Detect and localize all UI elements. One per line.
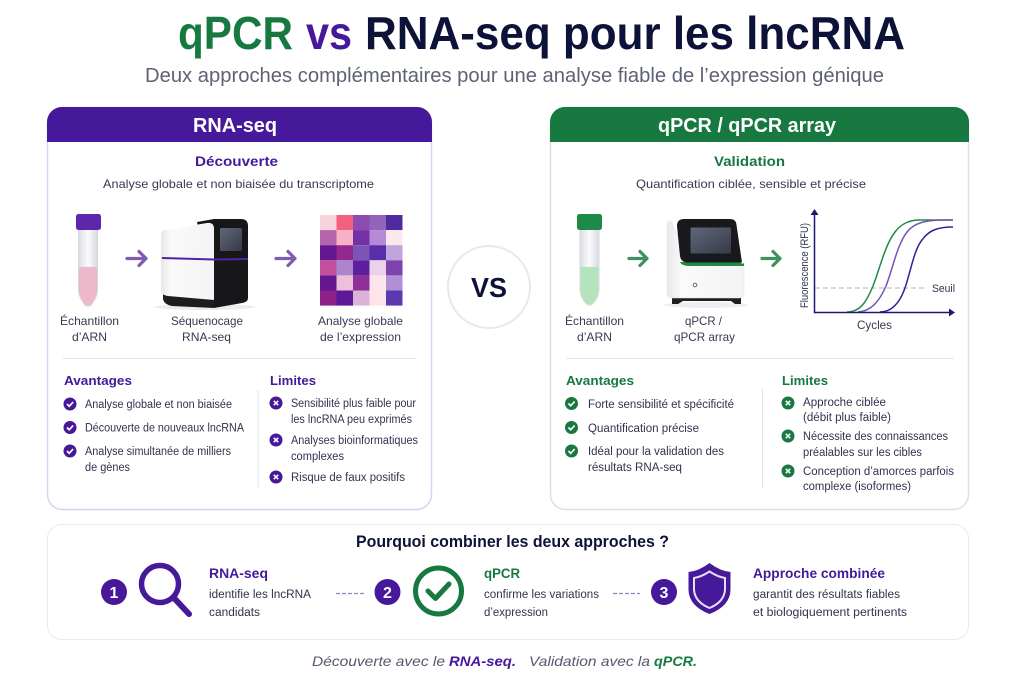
description: Quantification ciblée, sensible et précise xyxy=(636,177,866,191)
heading: Avantages: Avantages xyxy=(566,373,634,388)
label: instrument: qPCR / xyxy=(685,314,723,328)
arrow xyxy=(276,252,295,266)
label: sample xyxy=(60,313,119,344)
step 2 text: confirme les variations xyxy=(484,589,599,601)
heading: Limites: Limites xyxy=(782,373,828,388)
step 1 text: RNA-seq xyxy=(209,566,268,581)
list: avantages xyxy=(64,398,244,474)
panel header: RNA-seq xyxy=(47,107,432,142)
heading: Limites: Limites xyxy=(270,373,316,388)
step 3 text: garantit des résultats fiables xyxy=(753,589,900,601)
icon: qPCR machine xyxy=(664,219,748,308)
label: sample: Échantillon xyxy=(60,313,119,328)
list: limites: Approche ciblée xyxy=(803,397,886,409)
list: avantages xyxy=(565,397,734,474)
step 2 badge xyxy=(374,579,400,605)
label: threshold: Seuil xyxy=(932,283,955,295)
step 3 badge: 3 xyxy=(660,585,669,602)
panel header: qPCR: qPCR / qPCR array xyxy=(658,115,837,137)
list: avantages: Analyse simultanée de milliers xyxy=(85,446,231,458)
label: sample xyxy=(565,313,624,344)
footer tagline: Validation avec la xyxy=(529,653,650,669)
footer tagline xyxy=(312,653,697,669)
VS badge: VS xyxy=(471,272,507,303)
list: limites: complexe (isoformes) xyxy=(803,481,911,493)
list: limites: Analyses bioinformatiques xyxy=(291,435,418,447)
step 3 text xyxy=(753,566,907,619)
list: limites: Sensibilité plus faible pour xyxy=(291,398,416,410)
list: limites: Risque de faux positifs xyxy=(291,472,405,484)
label: sequencing: Séquenocage xyxy=(171,314,243,328)
chart: amplification curves xyxy=(799,209,955,332)
heading: Découverte: Découverte xyxy=(195,153,278,169)
list: avantages: Forte sensibilité et spécificité xyxy=(588,399,734,411)
step 2 text xyxy=(484,566,599,619)
step 2 text: qPCR xyxy=(484,566,520,581)
list: avantages: Analyse globale et non biaisée xyxy=(85,399,232,411)
icon: magnifier xyxy=(142,566,189,614)
arrow xyxy=(762,252,780,266)
label: instrument: qPCR array xyxy=(674,330,735,344)
list: limites: Nécessite des connaissances xyxy=(803,431,948,443)
icon: shield xyxy=(688,563,730,614)
icon: sample tube green xyxy=(577,214,602,305)
label: instrument xyxy=(674,314,735,344)
step 1 text: candidats xyxy=(209,607,260,619)
list: limites: (débit plus faible) xyxy=(803,412,891,424)
label: sample: d’ARN xyxy=(72,330,107,344)
list: limites: préalables sur les cibles xyxy=(803,447,922,459)
step 2 text: d’expression xyxy=(484,607,548,619)
step 2 badge: 2 xyxy=(383,585,392,602)
heatmap xyxy=(320,215,402,306)
title: vs xyxy=(306,7,352,59)
step 3 badge xyxy=(651,579,677,605)
panel header: RNA-seq: RNA-seq xyxy=(193,115,277,137)
step 1 badge xyxy=(101,579,127,605)
label: analysis xyxy=(318,314,403,344)
list: limites: Conception d’amorces parfois xyxy=(803,466,954,478)
label: analysis: Analyse globale xyxy=(318,314,403,328)
step 1 badge: 1 xyxy=(110,585,119,602)
list: limites: les lncRNA peu exprimés xyxy=(291,414,412,426)
step 1 text: identifie les lncRNA xyxy=(209,589,311,601)
list: limites: complexes xyxy=(291,451,344,463)
label: sequencing xyxy=(171,314,243,344)
axis label: x: Cycles xyxy=(857,318,892,332)
list: limites xyxy=(270,396,418,484)
title: qPCR xyxy=(178,7,293,59)
list: avantages: Quantification précise xyxy=(588,423,699,435)
icon: sequencer xyxy=(155,219,255,310)
label: analysis: de l’expression xyxy=(320,330,401,344)
panel: why combine xyxy=(48,524,968,640)
list: avantages: Idéal pour la validation des xyxy=(588,446,724,458)
list: avantages: de gènes xyxy=(85,462,130,474)
panel header: qPCR xyxy=(550,107,969,142)
label: sample: Échantillon xyxy=(565,313,624,328)
arrow xyxy=(127,252,146,266)
heading: Validation: Validation xyxy=(714,153,785,169)
footer tagline: Découverte avec le xyxy=(312,653,445,669)
VS badge xyxy=(448,246,530,328)
list: avantages: Découverte de nouveaux lncRNA xyxy=(85,422,244,434)
axis label: y: Fluorescence (RFU) xyxy=(799,223,811,308)
icon: check circle xyxy=(416,568,462,614)
icon: sample tube purple xyxy=(76,214,101,306)
list: avantages: résultats RNA-seq xyxy=(588,462,682,474)
panel: RNA-seq xyxy=(47,107,432,510)
label: sequencing: RNA-seq xyxy=(182,330,231,344)
subtitle: Deux approches complémentaires pour une analyse fiable de l’expression génique xyxy=(145,65,884,87)
heading: Pourquoi combiner les deux approches ? xyxy=(356,533,669,551)
step 3 text: et biologiquement pertinents xyxy=(753,607,907,619)
list: limites xyxy=(782,396,954,493)
label: sample: d’ARN xyxy=(577,330,612,344)
panel: qPCR xyxy=(550,107,969,510)
step 1 text xyxy=(209,566,311,619)
title: RNA-seq pour les lncRNA xyxy=(365,7,905,59)
footer tagline: qPCR. xyxy=(654,653,697,669)
arrow xyxy=(629,252,647,266)
heading: Avantages: Avantages xyxy=(64,373,132,388)
step 3 text: Approche combinée xyxy=(753,566,885,581)
description: Analyse globale et non biaisée du transcriptome xyxy=(103,177,374,191)
footer tagline: RNA-seq. xyxy=(449,653,516,669)
